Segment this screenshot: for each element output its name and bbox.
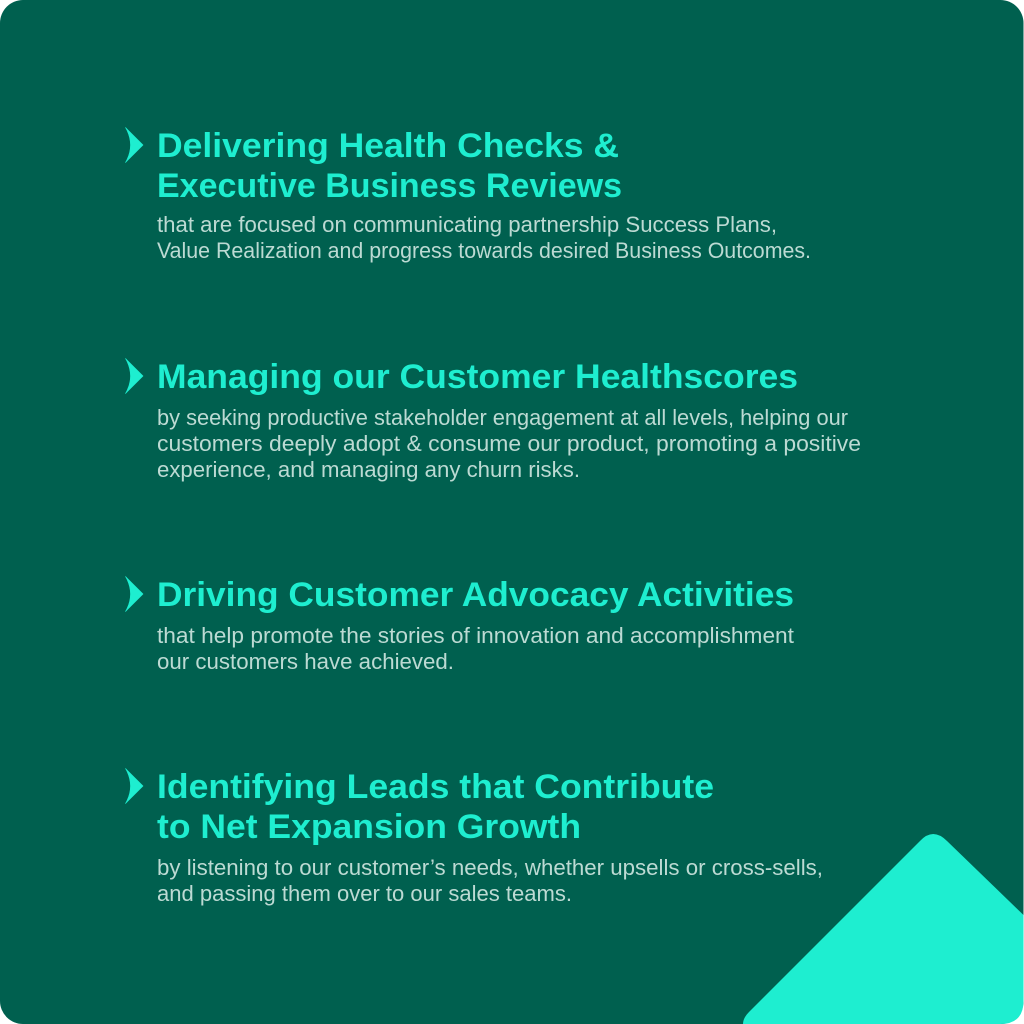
body text 4: and passing them over to our sales teams. xyxy=(157,881,572,906)
icon: chevron 3 xyxy=(126,576,143,612)
heading 4 xyxy=(157,768,714,846)
heading 1 xyxy=(157,127,622,205)
heading 1: Executive Business Reviews xyxy=(157,167,622,205)
body text 3 xyxy=(157,623,794,674)
body text 2: by seeking productive stakeholder engagement at all levels, helping our xyxy=(157,405,848,430)
item 4: leads xyxy=(126,768,823,906)
heading 2: Managing our Customer Healthscores xyxy=(157,358,798,396)
body text 4: by listening to our customer’s needs, whether upsells or cross-sells, xyxy=(157,855,823,880)
icon: chevron 4 xyxy=(126,768,143,804)
body text 3: our customers have achieved. xyxy=(157,649,454,674)
body text 1: Value Realization and progress towards desired Business Outcomes. xyxy=(157,238,811,263)
body text 2: experience, and managing any churn risks. xyxy=(157,457,580,482)
body text 2: customers deeply adopt & consume our product, promoting a positive xyxy=(157,431,861,456)
icon: chevron 1 xyxy=(126,128,143,162)
icon: chevron 2 xyxy=(126,358,143,394)
body text 4 xyxy=(157,855,823,906)
body text 3: that help promote the stories of innovation and accomplishment xyxy=(157,623,794,648)
decorative corner shape xyxy=(743,834,1024,1024)
body text 1 xyxy=(157,212,811,263)
heading 4: to Net Expansion Growth xyxy=(157,808,581,846)
body text 1: that are focused on communicating partnership Success Plans, xyxy=(157,212,777,237)
item 2: healthscores xyxy=(126,358,861,482)
heading 1: Delivering Health Checks & xyxy=(157,127,619,165)
item 1: health checks xyxy=(126,127,811,263)
item 3: advocacy xyxy=(126,576,794,674)
body text 2 xyxy=(157,405,861,482)
heading 4: Identifying Leads that Contribute xyxy=(157,768,714,806)
heading 3: Driving Customer Advocacy Activities xyxy=(157,576,794,614)
